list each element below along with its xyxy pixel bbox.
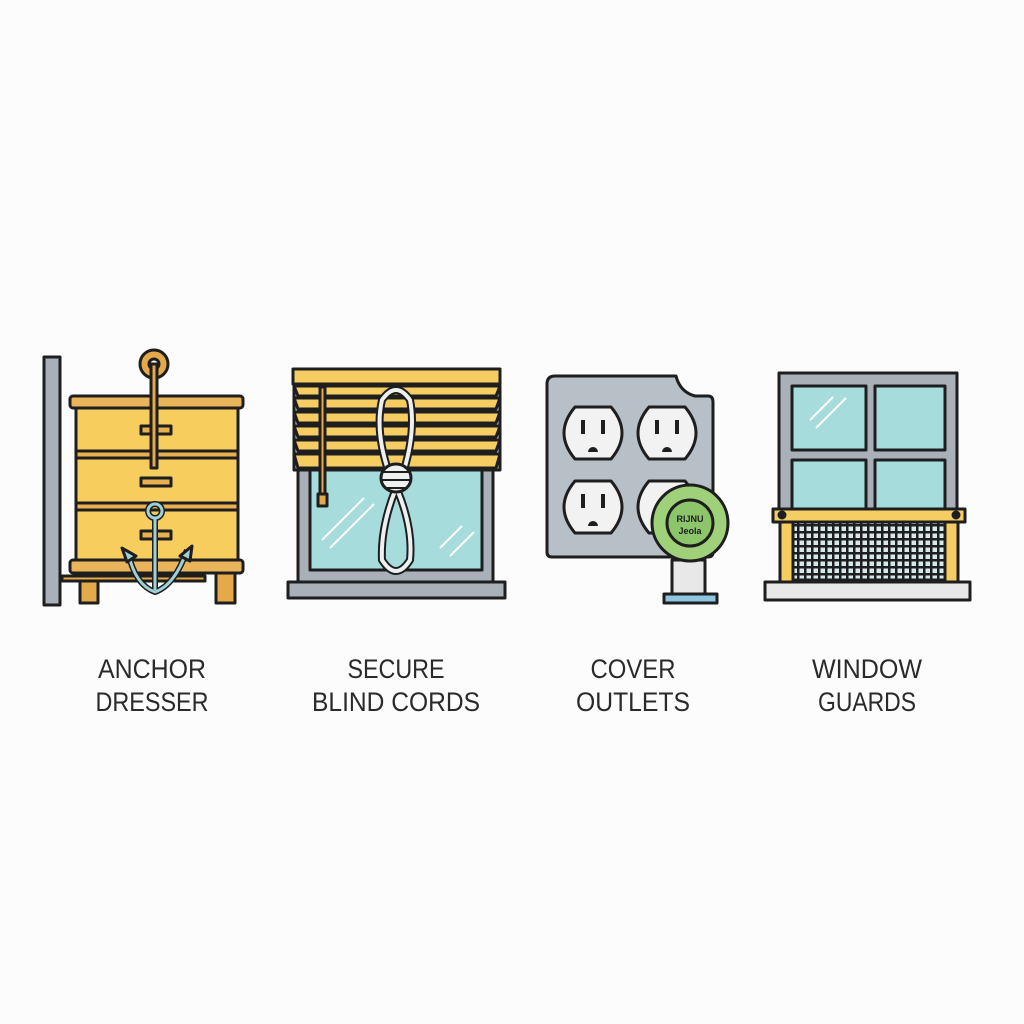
label: secure blind cords — [312, 654, 480, 717]
label: window guards: WINDOW — [812, 654, 922, 684]
icon: anchor dresser — [44, 350, 243, 605]
label: cover outlets — [576, 654, 690, 717]
label: cover outlets: OUTLETS — [576, 687, 690, 717]
label: window guards — [812, 654, 922, 717]
label: secure blind cords: BLIND CORDS — [312, 687, 480, 717]
label: secure blind cords: SECURE — [348, 654, 444, 684]
icon: outlet covers: Jeola — [678, 526, 703, 536]
icon: outlet covers — [547, 376, 728, 603]
label: cover outlets: COVER — [590, 654, 676, 684]
icon: outlet covers: RIJNU — [676, 514, 704, 524]
label: window guards: GUARDS — [818, 687, 916, 717]
label: anchor dresser: DRESSER — [96, 687, 208, 717]
label: anchor dresser: ANCHOR — [98, 654, 206, 684]
icon: window guards — [765, 373, 970, 600]
icon: blind cords — [288, 369, 505, 598]
label: anchor dresser — [96, 654, 208, 717]
